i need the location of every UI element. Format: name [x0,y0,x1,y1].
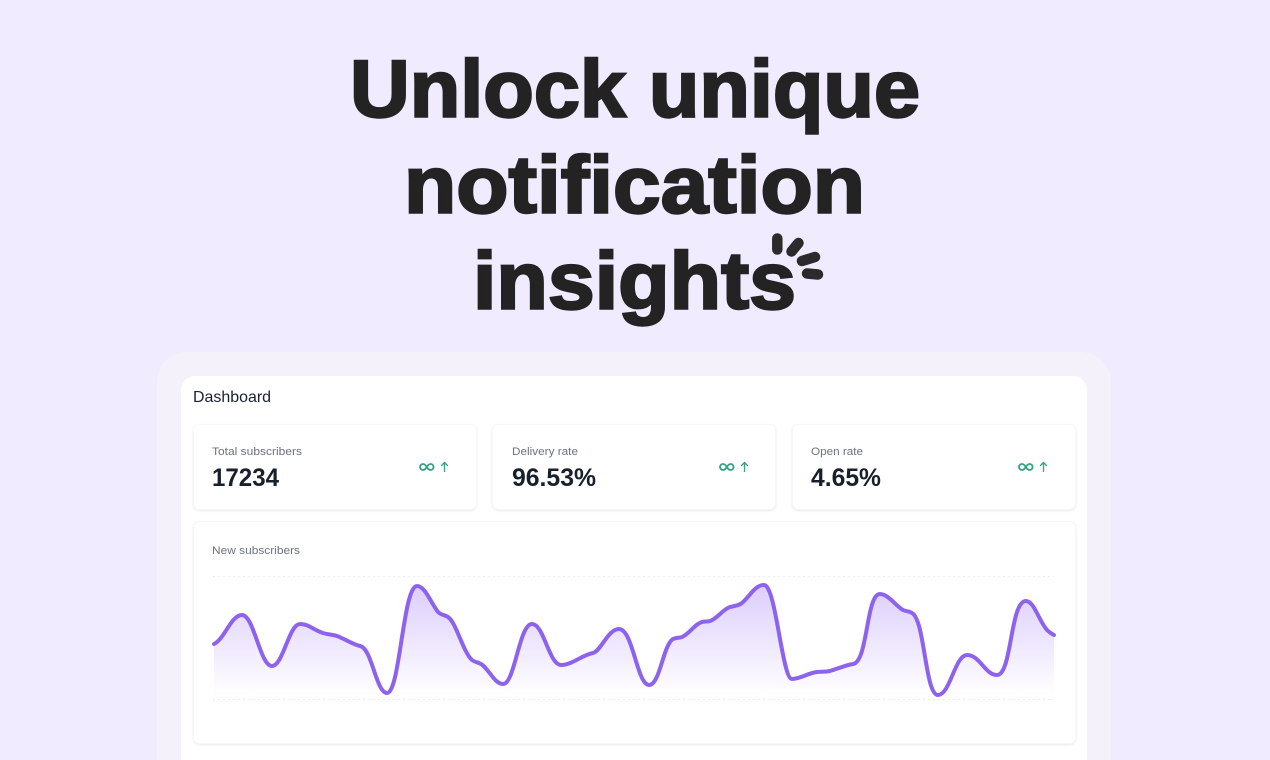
panel: delivery rate [492,424,776,510]
panel: open rate [792,424,1076,510]
title: insights [473,236,796,326]
icon: infinity and up arrow [720,462,748,472]
title [350,44,920,326]
panel: delivery rate: 96.53% [512,464,596,492]
panel: delivery rate: Delivery rate [512,446,578,458]
icon: infinity and up arrow [420,462,448,472]
title: Unlock unique [350,44,920,134]
area chart [214,585,1054,698]
icon: sparkle accent [777,238,818,274]
panel: open rate: 4.65% [811,464,881,492]
panel: total subscribers [194,424,476,510]
title: notification [404,140,865,230]
heading: dashboard: Dashboard [193,389,271,406]
panel: new subscribers chart [194,522,1076,744]
panel: dashboard [181,376,1087,760]
panel: open rate: Open rate [811,446,863,458]
panel: outer dashboard frame [157,352,1111,760]
panel: total subscribers: Total subscribers [212,446,303,458]
icon: infinity and up arrow [1019,462,1046,472]
chart label: New subscribers [212,545,301,557]
panel: total subscribers: 17234 [212,464,279,492]
